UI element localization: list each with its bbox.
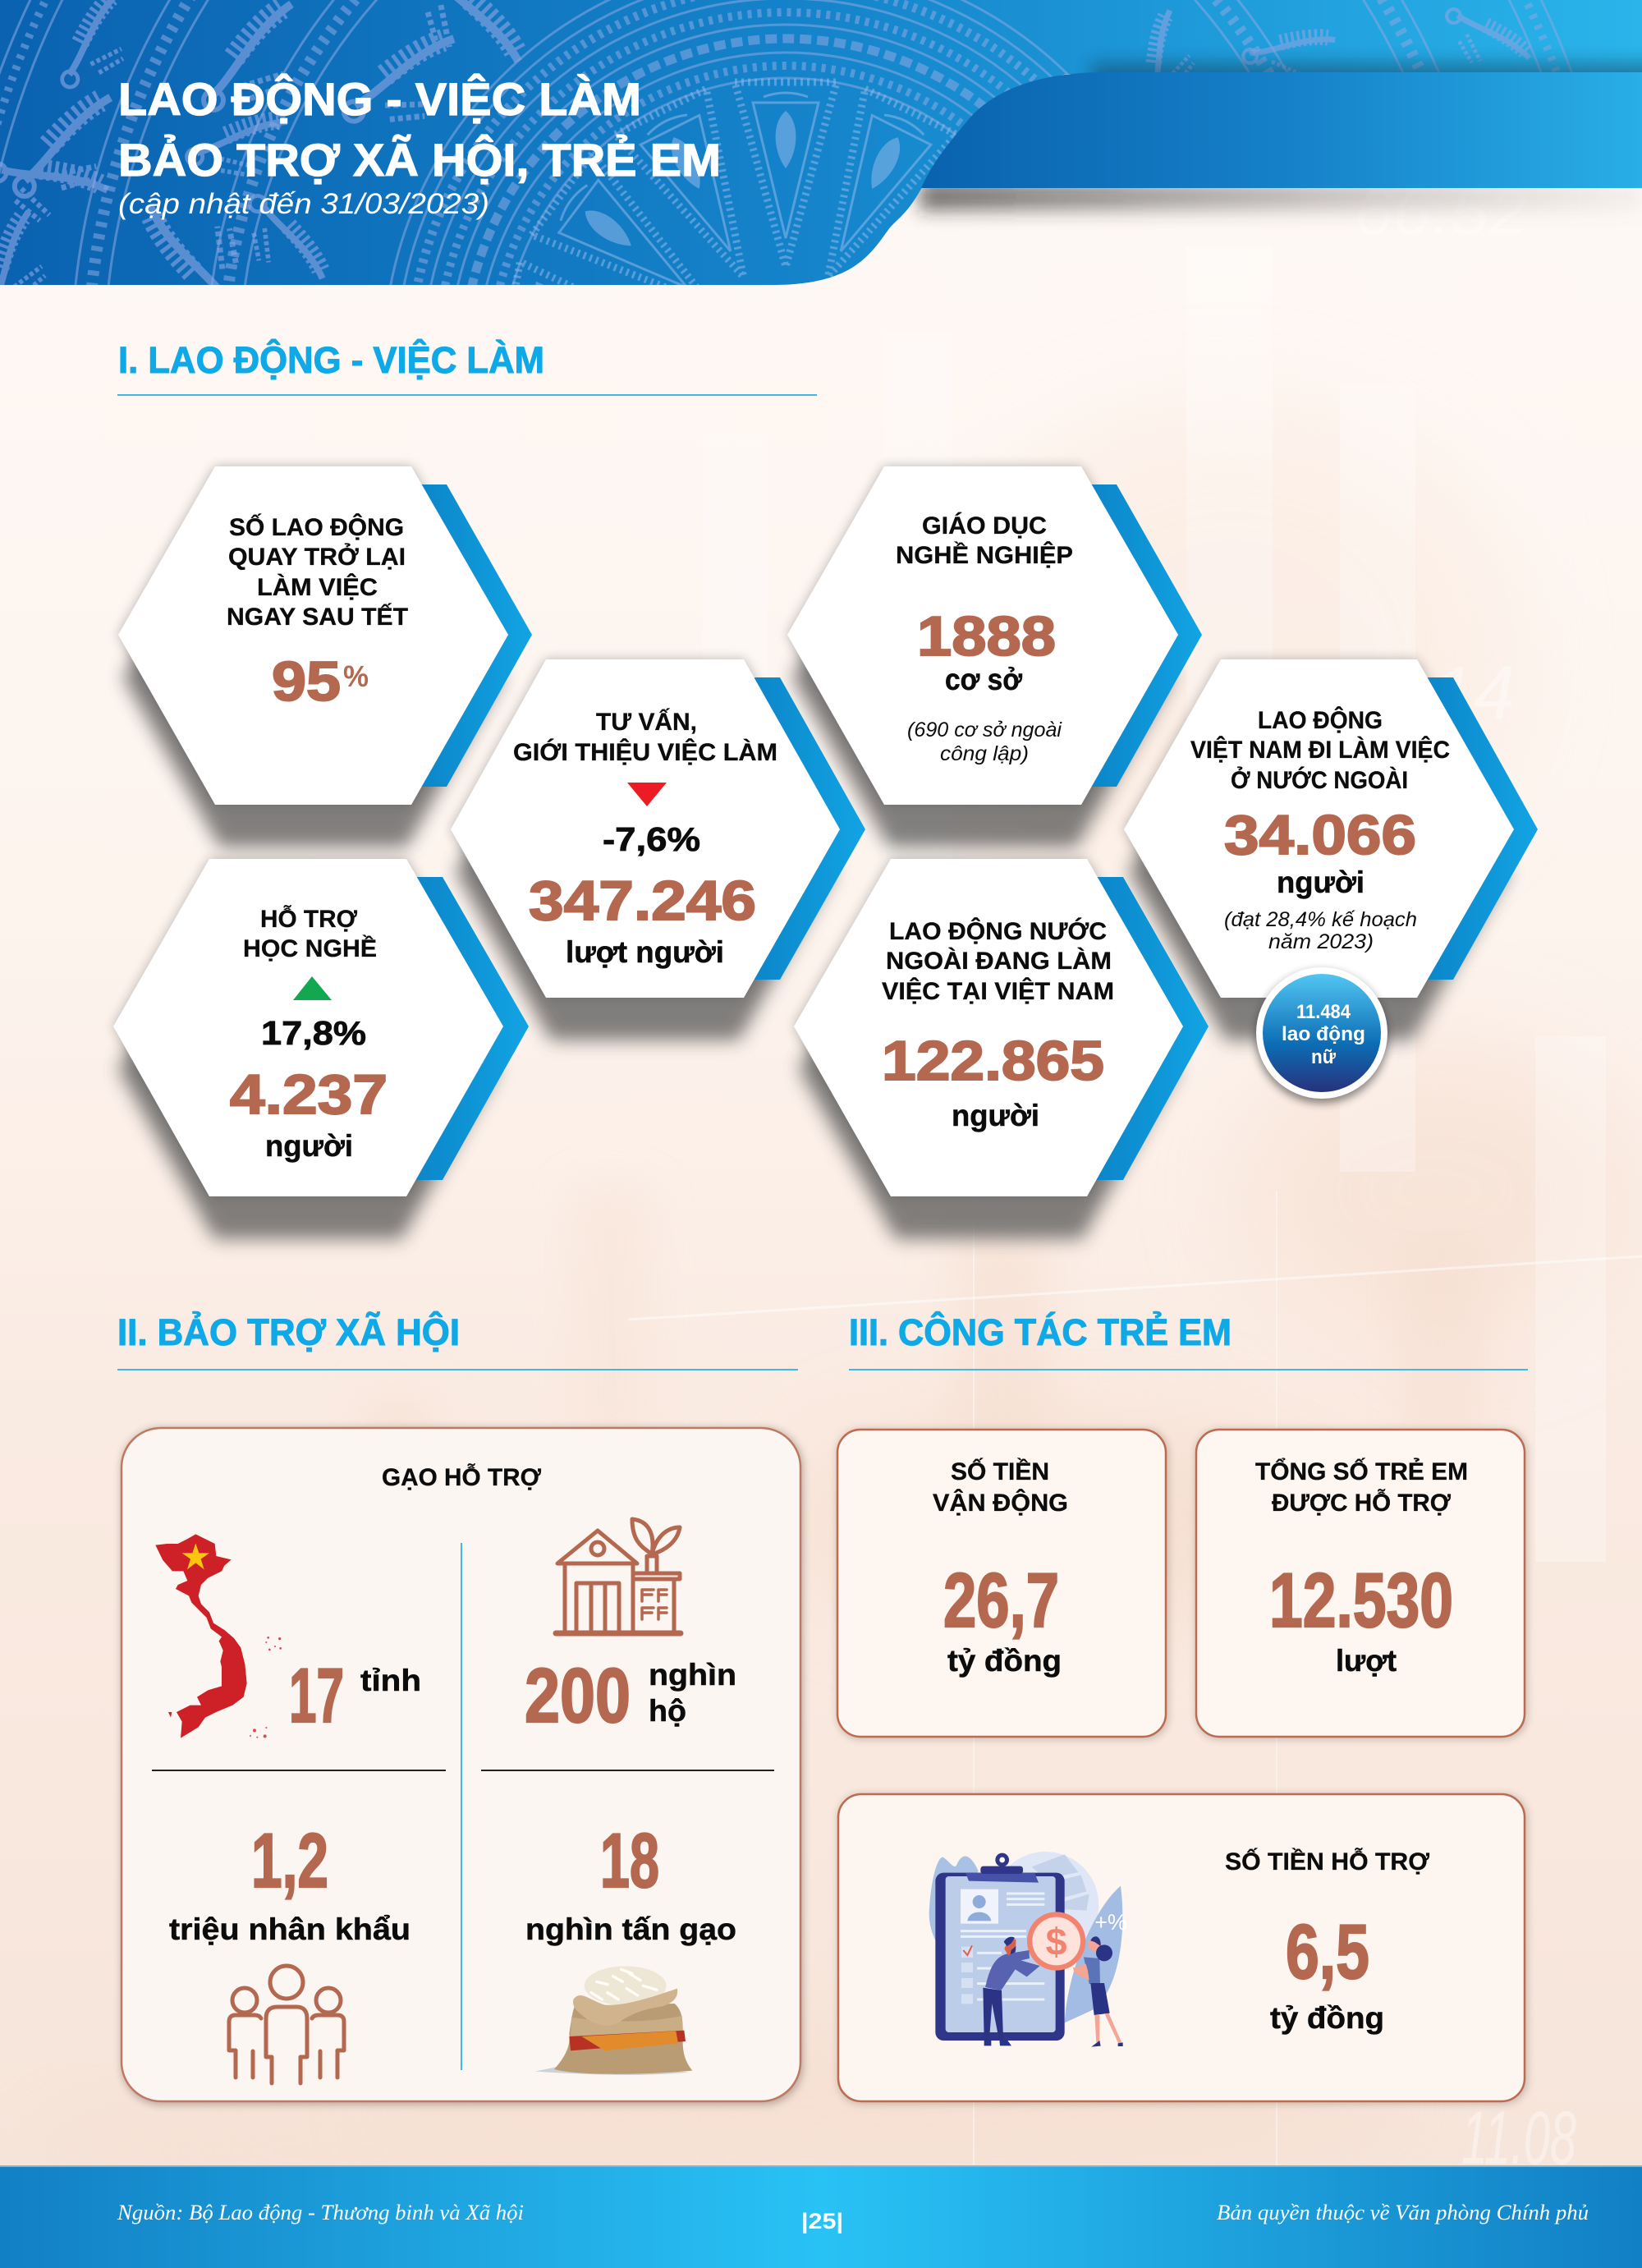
hexagon: Vietnamese workers abroad [1124, 659, 1538, 998]
title [118, 73, 721, 220]
hexagon shadows [113, 466, 1514, 1239]
stat: 18 thousand tons: 18 [600, 1817, 659, 1903]
title: BẢO TRỢ XÃ HỘI, TRẺ EM [118, 134, 721, 186]
hexagon: Vietnamese workers abroad: (đạt 28,4% kế hoạch [1224, 908, 1417, 931]
hexagon: job counselling: GIỚI THIỆU VIỆC LÀM [513, 738, 777, 766]
panel: money supported: tỷ đồng [1270, 2001, 1384, 2035]
page background: 66.52 [1355, 176, 1527, 248]
hexagon: job counselling: TƯ VẤN, [596, 708, 697, 736]
panel title: GẠO HỖ TRỢ [382, 1463, 541, 1491]
panel: money raised [837, 1430, 1168, 1739]
footer bar [0, 2165, 1642, 2268]
icon: rice sack [535, 1966, 692, 2075]
page background: 14 [1433, 651, 1515, 735]
panel: money raised: 26,7 [943, 1557, 1059, 1643]
hexagon: vocational education: công lập) [940, 742, 1029, 765]
hexagon: vocational support: 4.237 [230, 1063, 388, 1126]
title: LAO ĐỘNG - VIỆC LÀM [118, 73, 641, 125]
hexagon: job counselling: -7,6% [603, 820, 700, 858]
stat: 1.2 million people: 1,2 [251, 1817, 328, 1903]
page background: 11.08 [1461, 2096, 1576, 2180]
hexagon: Vietnamese workers abroad: VIỆT NAM ĐI LÀM VIỆC [1190, 736, 1450, 764]
panel: money supported [838, 1794, 1527, 2104]
hexagon: Vietnamese workers abroad: người [1277, 865, 1365, 899]
stat: 1.2 million people [169, 1817, 410, 1946]
source note: Nguồn: Bộ Lao động - Thương binh và Xã hội [117, 2201, 524, 2224]
hexagon: job counselling: lượt người [566, 935, 724, 969]
panel: money raised: VẬN ĐỘNG [933, 1489, 1068, 1517]
hexagon: vocational support: HỌC NGHỀ [243, 934, 377, 962]
hexagon: vocational education: (690 cơ sở ngoài [907, 719, 1062, 741]
header ribbon [921, 72, 1642, 188]
hexagon: foreign workers in Vietnam: NGOÀI ĐANG LÀM [886, 947, 1112, 975]
illustration: clipboard and coin: +% [1094, 1910, 1127, 1935]
stat: 200 thousand households [525, 1652, 736, 1738]
stat: 200 thousand households: hộ [649, 1694, 686, 1728]
panel: children supported: lượt [1336, 1644, 1397, 1678]
panel: rice support [122, 1428, 803, 2105]
heading: section I: I. LAO ĐỘNG - VIỆC LÀM [118, 339, 544, 381]
hexagon: Vietnamese workers abroad: Ở NƯỚC NGOÀI [1231, 766, 1408, 794]
panel: children supported [1196, 1430, 1527, 1739]
page number: |25| [801, 2209, 843, 2234]
hexagon: workers returning: QUAY TRỞ LẠI [228, 543, 406, 571]
hexagon: foreign workers in Vietnam: 122.865 [882, 1030, 1104, 1092]
panel: money supported: SỐ TIỀN HỖ TRỢ [1225, 1848, 1429, 1875]
illustration: clipboard and coin [929, 1852, 1127, 2047]
heading: section II: II. BẢO TRỢ XÃ HỘI [117, 1311, 460, 1353]
page background: 25 [352, 1520, 493, 1621]
stat: 200 thousand households: nghìn [649, 1658, 736, 1692]
panel: children supported: 12.530 [1269, 1557, 1453, 1643]
hexagon: vocational support: 17,8% [261, 1014, 366, 1052]
callout: female workers badge: nữ [1311, 1046, 1337, 1068]
hexagon: vocational education: NGHỀ NGHIỆP [896, 541, 1073, 569]
heading: section III: III. CÔNG TÁC TRẺ EM [849, 1311, 1232, 1353]
hexagon: workers returning: LÀM VIỆC [257, 573, 378, 601]
hexagon: Vietnamese workers abroad: 34.066 [1224, 804, 1416, 866]
hexagon: vocational support [113, 859, 529, 1196]
illustration: clipboard and coin: $ [1046, 1921, 1067, 1963]
callout: female workers badge: lao động [1282, 1023, 1365, 1045]
hexagon: workers returning: SỐ LAO ĐỘNG [229, 513, 404, 541]
stat: 200 thousand households: 200 [525, 1652, 631, 1738]
hexagon: foreign workers in Vietnam: VIỆC TẠI VIỆT NAM [882, 977, 1114, 1005]
hexagon: foreign workers in Vietnam [794, 859, 1209, 1196]
hexagon: workers returning: NGAY SAU TẾT [227, 603, 408, 631]
page background: 55.01 [1330, 1653, 1535, 1737]
panel: money raised: SỐ TIỀN [951, 1458, 1049, 1485]
stat: 17 provinces: 17 [289, 1652, 344, 1738]
hexagon: vocational education: 1888 [917, 605, 1056, 668]
panel: money supported: 6,5 [1286, 1908, 1369, 1995]
stat: 18 thousand tons [525, 1817, 736, 1946]
hexagon: vocational support: HỖ TRỢ [260, 905, 357, 933]
hexagon: Vietnamese workers abroad: năm 2023) [1268, 930, 1374, 953]
header ribbon shadow [920, 182, 1642, 210]
callout: female workers badge [1255, 967, 1388, 1104]
hexagon: foreign workers in Vietnam: người [952, 1099, 1039, 1132]
hexagon: workers returning: 95 [272, 650, 341, 713]
panel: children supported: ĐƯỢC HỖ TRỢ [1272, 1489, 1451, 1517]
header banner with drum pattern [0, 0, 1642, 285]
title: (cập nhật đến 31/03/2023) [118, 188, 489, 220]
hexagon: vocational support: người [265, 1129, 353, 1163]
copyright note: Bản quyền thuộc về Văn phòng Chính phủ [1217, 2201, 1589, 2224]
panel: money raised: tỷ đồng [947, 1644, 1062, 1678]
stat: 17 provinces: tỉnh [360, 1664, 421, 1697]
hexagon: job counselling: 347.246 [529, 870, 756, 932]
hexagon: vocational education: GIÁO DỤC [922, 512, 1047, 539]
stat: 17 provinces [289, 1652, 421, 1738]
stat: 1.2 million people: triệu nhân khẩu [169, 1912, 410, 1946]
hexagon: foreign workers in Vietnam: LAO ĐỘNG NƯỚC [889, 917, 1107, 945]
callout: female workers badge: 11.484 [1296, 1001, 1351, 1023]
hexagon: workers returning [118, 466, 532, 805]
icon: people [229, 1966, 344, 2083]
hexagon: vocational education [787, 466, 1202, 805]
panel: children supported: TỔNG SỐ TRẺ EM [1255, 1458, 1468, 1485]
icon: Vietnam map [155, 1534, 282, 1738]
hexagon: job counselling [451, 659, 865, 998]
hexagon: vocational education: cơ sở [945, 663, 1023, 696]
hexagon: Vietnamese workers abroad: LAO ĐỘNG [1258, 706, 1383, 734]
stat: 18 thousand tons: nghìn tấn gạo [525, 1912, 736, 1946]
hexagon: workers returning: % [343, 659, 369, 693]
icon: house [556, 1519, 681, 1633]
